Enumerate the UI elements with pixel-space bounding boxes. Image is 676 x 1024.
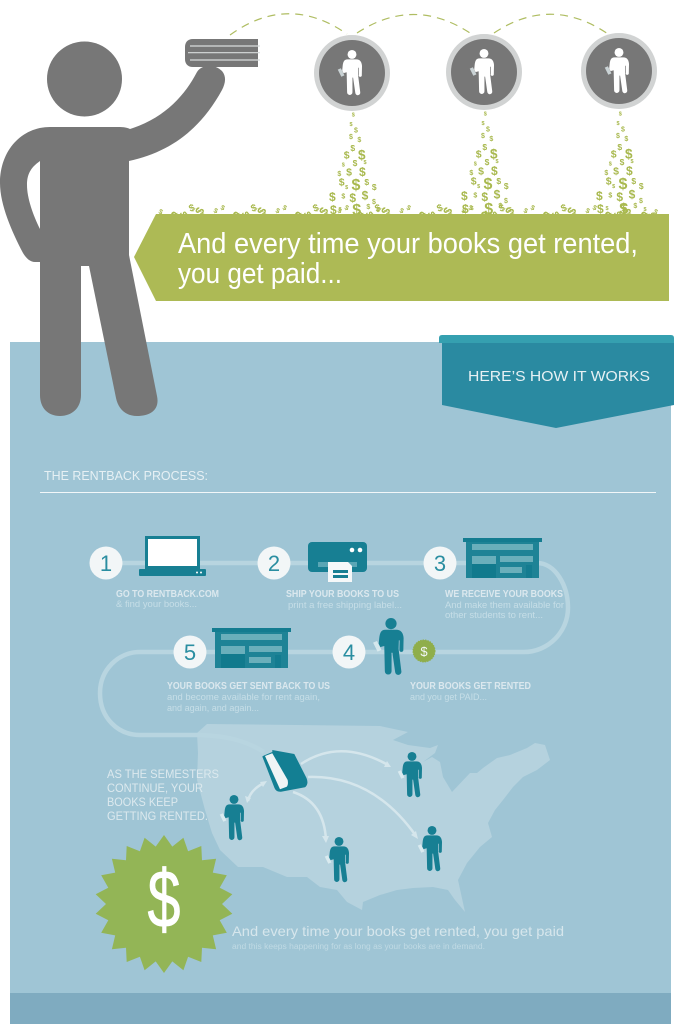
step 2: ship your books: SHIP YOUR BOOKS TO US — [286, 589, 399, 600]
step 3: we receive your books: And make them available for — [445, 600, 564, 610]
step 3: we receive your books: other students to rent... — [445, 610, 543, 620]
renter on map, north — [398, 752, 422, 797]
section heading: THE RENTBACK PROCESS: — [44, 468, 208, 483]
dollar sign row above banner: $$$$$$$$ — [192, 204, 635, 218]
headline text: you get paid... — [178, 258, 342, 290]
semesters caption — [107, 767, 219, 823]
bottom band — [10, 993, 671, 1024]
reader badge 3 — [581, 33, 657, 109]
step 5: your books get sent back — [167, 628, 330, 713]
renter on map, east — [418, 826, 442, 871]
step 3: we receive your books: WE RECEIVE YOUR BOOKS — [445, 589, 563, 600]
step 2: ship your books — [258, 542, 402, 610]
semesters caption: GETTING RENTED. — [107, 809, 208, 823]
coin icon: $ — [420, 644, 428, 659]
headline text: And every time your books get rented, — [178, 228, 638, 260]
winding process path — [100, 563, 568, 752]
semesters caption: BOOKS KEEP — [107, 795, 178, 809]
step 1: go to rentback.com: 1 — [100, 551, 112, 576]
reader badge 2 — [446, 34, 522, 110]
semesters caption: AS THE SEMESTERS — [107, 767, 219, 781]
step 2: ship your books: print a free shipping label... — [288, 600, 402, 610]
renter on map, south — [325, 837, 349, 882]
green dollar starburst: $ — [148, 854, 180, 945]
step 4: your books get rented: YOUR BOOKS GET RENTED — [410, 681, 531, 692]
here's how it works ribbon — [439, 335, 674, 428]
dollar sign row above banner: $$$$$$$$ — [187, 202, 629, 215]
step 5: your books get sent back: and again, and again... — [167, 703, 259, 713]
reader badge 1 — [314, 35, 390, 111]
closing statement: and this keeps happening for as long as your books are in demand. — [232, 942, 485, 951]
step 3: we receive your books — [424, 538, 564, 620]
ribbon text: HERE’S HOW IT WORKS — [468, 368, 650, 385]
step 1: go to rentback.com — [90, 536, 219, 609]
dollar sign row above banner: $$$$$$$$$ — [163, 209, 652, 226]
grey book — [185, 39, 260, 67]
step 5: your books get sent back: and become available for rent again, — [167, 692, 320, 702]
step 1: go to rentback.com: GO TO RENTBACK.COM — [116, 589, 219, 600]
dollar fountain under reader 1 — [329, 112, 380, 219]
closing statement — [232, 923, 564, 951]
closing statement: And every time your books get rented, you get paid — [232, 923, 564, 939]
dollar fountain under reader 2 — [461, 111, 512, 218]
map of the United States — [197, 724, 550, 912]
green headline banner — [134, 214, 669, 301]
step 5: your books get sent back: YOUR BOOKS GET SENT BACK TO US — [167, 681, 330, 692]
step 2: ship your books: 2 — [268, 551, 280, 576]
step 5: your books get sent back: 5 — [184, 640, 196, 665]
step 4: your books get rented — [332, 618, 531, 702]
distribution arrows on map — [245, 751, 418, 843]
printer icon — [308, 542, 367, 582]
laptop icon — [139, 536, 206, 576]
dollar sign row above banner — [157, 202, 659, 226]
large grey man holding up a book — [0, 42, 225, 416]
teal book on map — [262, 750, 307, 792]
dollar sign row above banner: $$$$$$$$$ — [176, 210, 657, 221]
green dollar starburst — [96, 835, 232, 973]
blue process panel — [10, 342, 671, 1024]
step 1: go to rentback.com: & find your books... — [116, 599, 197, 609]
headline text — [178, 228, 638, 290]
coin icon — [413, 640, 435, 662]
semesters caption: CONTINUE, YOUR — [107, 781, 203, 795]
dollar sign row above banner: $$$$$$$$$$$$$$$$ — [157, 204, 659, 217]
renter on map, west — [220, 795, 244, 840]
step 3: we receive your books: 3 — [434, 551, 446, 576]
dollar fountain under reader 3 — [596, 111, 647, 218]
step 4: your books get rented: and you get PAID... — [410, 692, 487, 702]
step 4: your books get rented: 4 — [343, 640, 355, 665]
dashed arcs between readers — [230, 14, 608, 35]
